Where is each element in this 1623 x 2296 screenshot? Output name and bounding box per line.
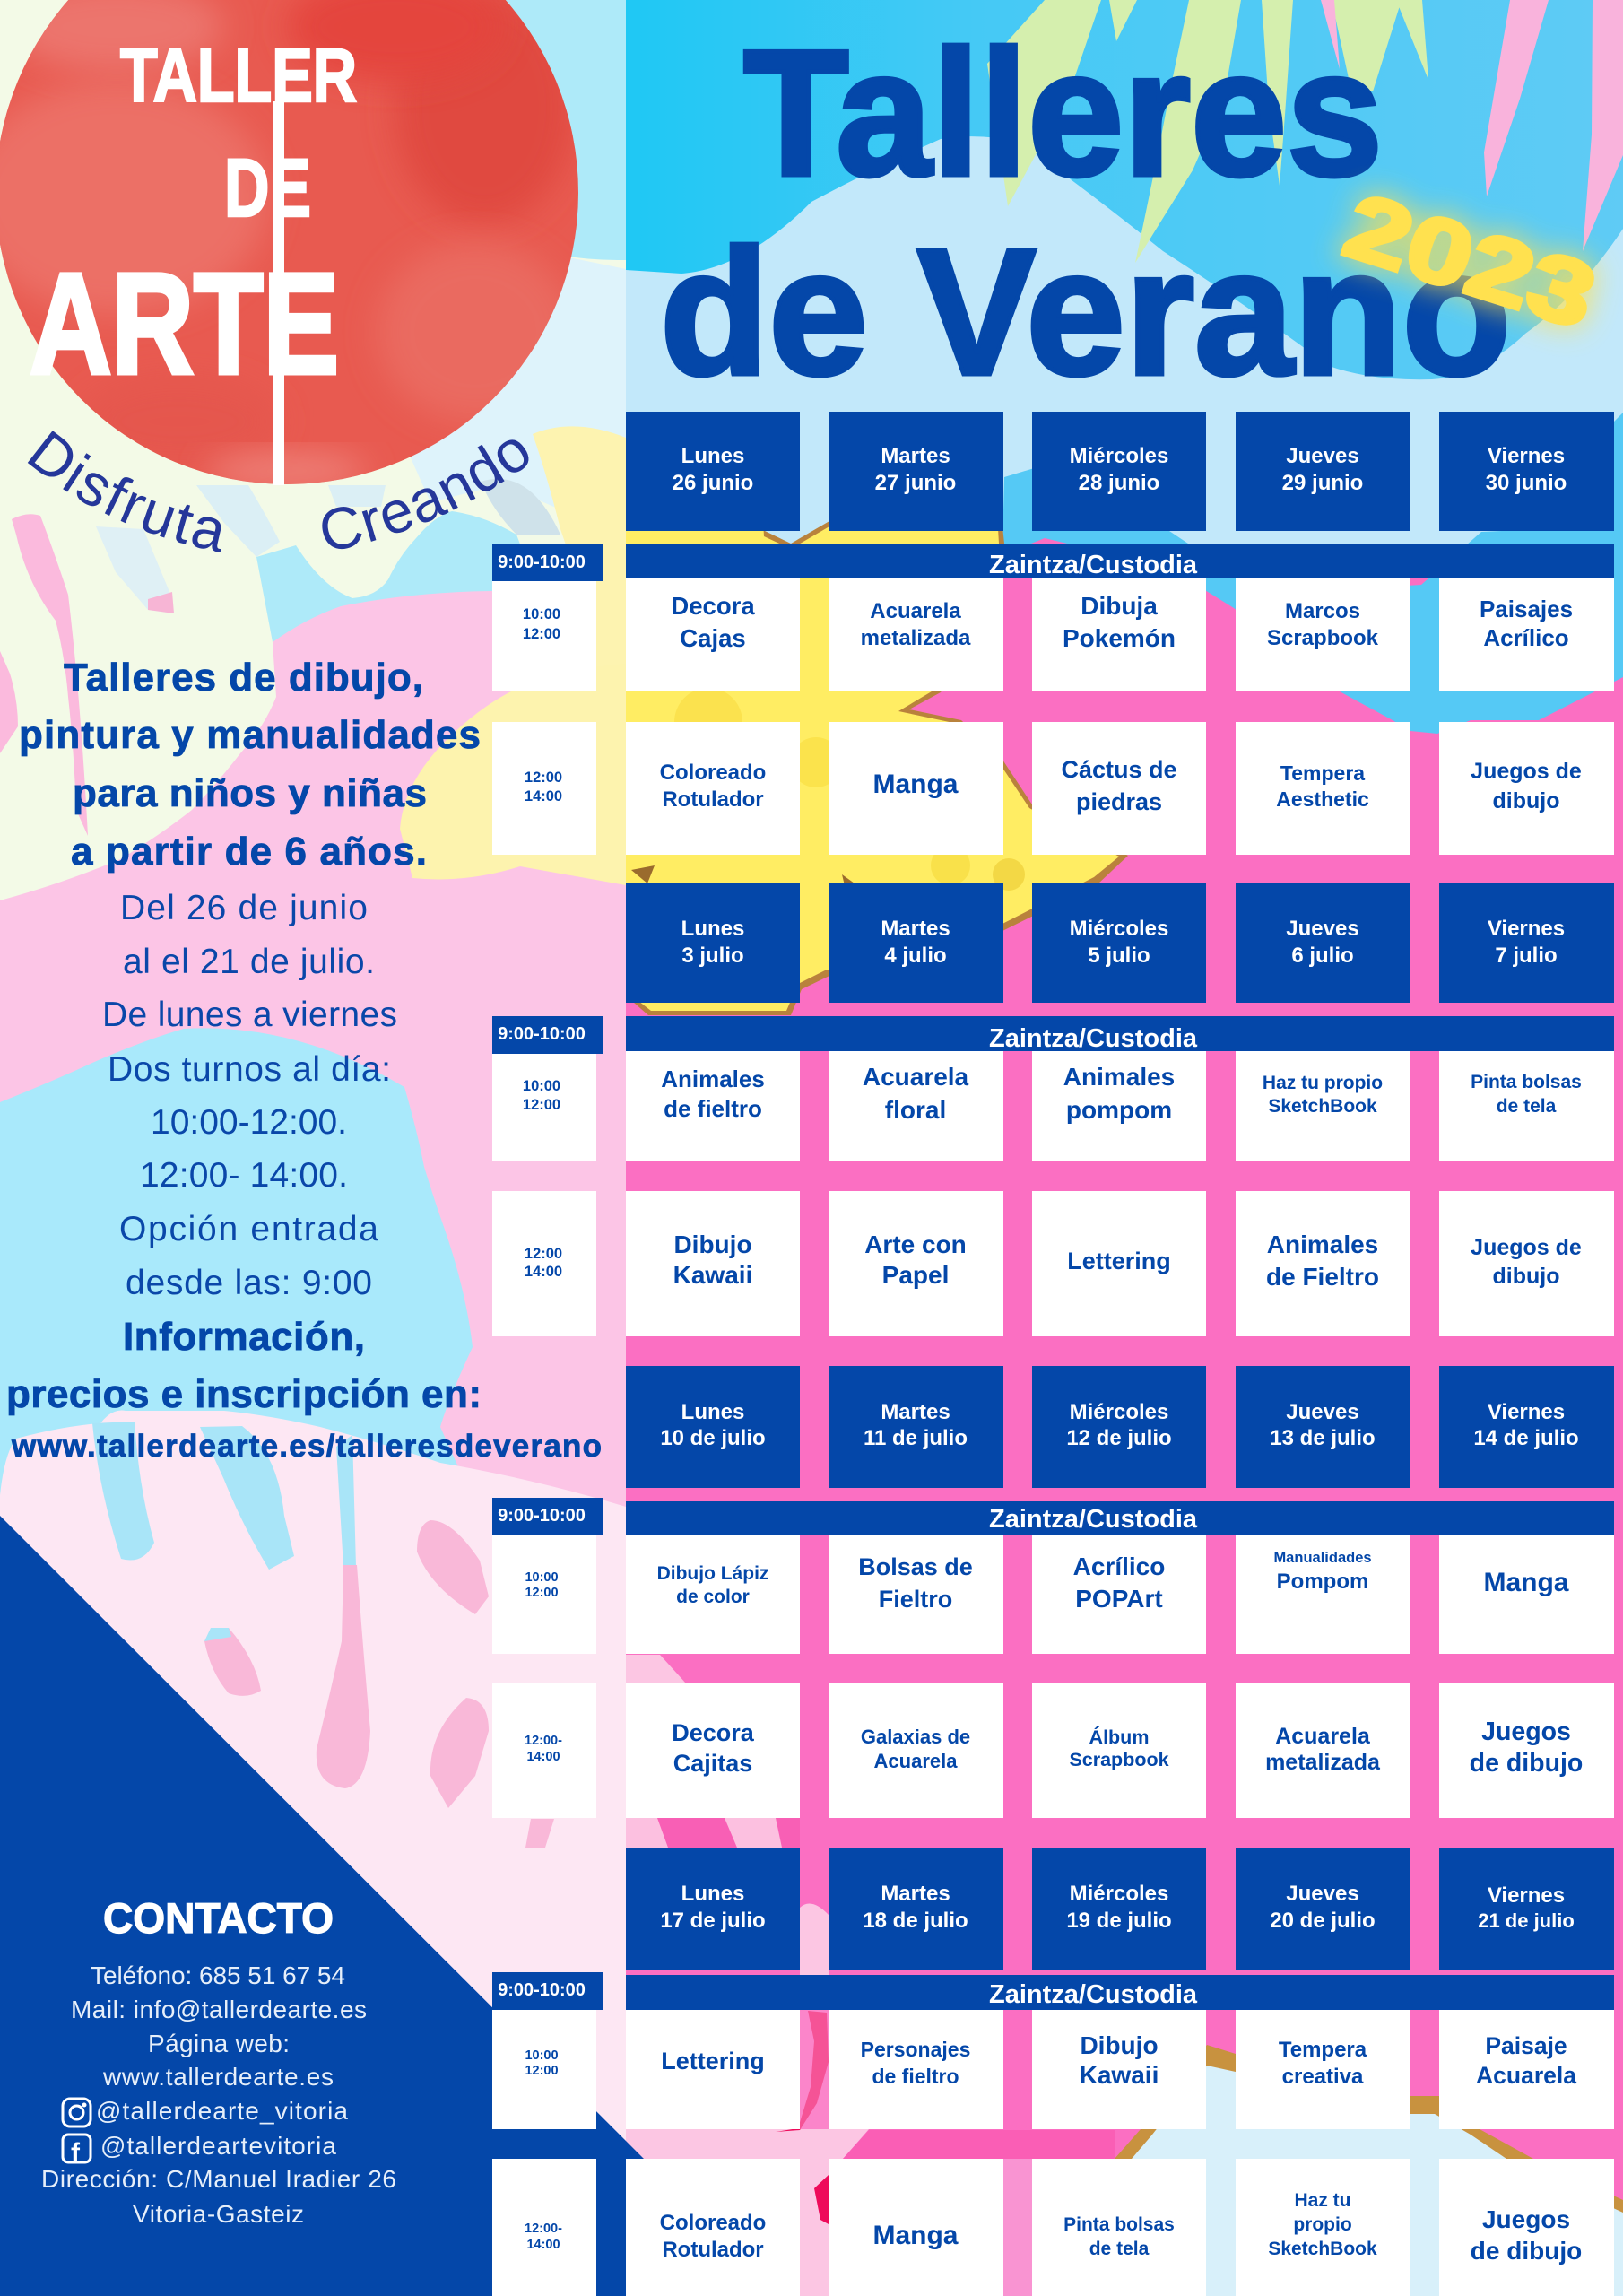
icon: red watercolor circle	[0, 0, 578, 489]
week 4 day headers: 18 de julio	[863, 1909, 968, 1933]
week 2 morning workshops: Acuarela	[863, 1063, 969, 1091]
icon: pink leaves	[1321, 0, 1623, 251]
week 3 morning workshops: Dibujo Lápiz	[657, 1563, 768, 1584]
time column	[492, 544, 603, 2296]
week 2 midday workshops: Dibujo	[673, 1231, 752, 1258]
contact details: @tallerdeartevitoria	[100, 2132, 336, 2160]
week 3 day headers: Miércoles	[1070, 1400, 1168, 1424]
week 3 morning workshops	[626, 1535, 1614, 1654]
week 1 day headers: 29 junio	[1282, 471, 1363, 495]
slot: midday week 2	[492, 1191, 596, 1336]
week 4 day headers: 20 de julio	[1270, 1909, 1376, 1933]
label: care hour week 3	[492, 1498, 603, 1535]
logo: taller de arte	[0, 0, 578, 552]
week 1 day headers: Jueves	[1286, 444, 1359, 468]
week 3 morning workshops: Fieltro	[879, 1586, 952, 1613]
intro text block: pintura y manualidades	[19, 713, 481, 757]
slot: midday week 4: 12:00-	[525, 2222, 562, 2236]
week 2 day headers: 4 julio	[884, 944, 947, 968]
contact details: Vitoria-Gasteiz	[133, 2200, 304, 2228]
week 4 midday workshops: Pinta bolsas	[1063, 2214, 1175, 2235]
week 4 day headers: 19 de julio	[1066, 1909, 1172, 1933]
heading: CONTACTO: CONTACTO	[103, 1894, 334, 1942]
main title: Talleres	[743, 13, 1383, 213]
slot: morning week 3: 10:00	[525, 1570, 559, 1585]
week 1 morning workshops: Acrílico	[1483, 624, 1569, 651]
slot: midday week 4: 14:00	[526, 2238, 560, 2252]
slot: morning week 4: 10:00	[525, 2048, 559, 2063]
slot: midday week 3: 14:00	[526, 1750, 560, 1764]
care bar week 1	[626, 544, 1614, 579]
week 2 midday workshops: Lettering	[1067, 1248, 1171, 1274]
week 1 midday workshops: Juegos de	[1471, 759, 1582, 784]
week 1 morning workshops: Decora	[671, 592, 755, 620]
week 4 morning workshops: Personajes	[861, 2038, 970, 2061]
week 4 midday workshops: SketchBook	[1268, 2239, 1377, 2259]
week 4 day headers: 17 de julio	[660, 1909, 766, 1933]
week 2 morning workshops: Animales	[1063, 1063, 1175, 1091]
icon: grey leaf	[481, 479, 560, 535]
week 3 morning workshops: Manualidades	[1273, 1550, 1372, 1566]
icon: right lower pink	[843, 2130, 1115, 2159]
week 4 day headers: Miércoles	[1070, 1882, 1168, 1906]
slot: midday week 1: 14:00	[525, 788, 562, 804]
year badge 2023: 2023	[1333, 174, 1607, 348]
week 4 midday workshops: Rotulador	[662, 2238, 764, 2262]
label: care hour week 1	[492, 544, 603, 581]
slot: midday week 1: 12:00	[525, 770, 562, 786]
icon: star cookie top faded	[533, 426, 626, 668]
week 2 day headers: 6 julio	[1291, 944, 1354, 968]
week 3 day headers: Jueves	[1286, 1400, 1359, 1424]
week 1 morning workshops: Scrapbook	[1267, 626, 1379, 650]
week 4 midday workshops: Juegos	[1482, 2205, 1570, 2233]
icon: facebook	[63, 2135, 91, 2168]
icon: star cookie arm faded	[400, 664, 626, 885]
slot: midday week 3	[492, 1683, 596, 1818]
label: care hour week 2: 9:00-10:00	[498, 1024, 586, 1044]
week 3 midday workshops: Decora	[672, 1719, 755, 1746]
week 2 morning workshops: Animales	[661, 1065, 765, 1092]
week 2 morning workshops	[626, 1051, 1614, 1161]
icon: column wash	[1003, 2159, 1032, 2296]
slot: morning week 1: 10:00	[523, 606, 560, 622]
icon: magenta stripes	[657, 1818, 800, 1848]
contact details: www.tallerdearte.es	[102, 2063, 334, 2091]
intro text block: Del 26 de junio	[120, 889, 368, 927]
intro text block: a partir de 6 años.	[71, 830, 427, 874]
week 2 morning workshops: Pinta bolsas	[1471, 1072, 1582, 1092]
week 2 morning workshops: pompom	[1066, 1096, 1172, 1124]
week 2 day headers: Viernes	[1488, 917, 1565, 941]
week 3 day headers: 12 de julio	[1066, 1426, 1172, 1450]
care bar week 3	[626, 1501, 1614, 1535]
week 2 day headers	[626, 883, 1614, 1003]
week 4 morning workshops: creativa	[1282, 2065, 1364, 2089]
week 4 day headers: 21 de julio	[1478, 1909, 1575, 1932]
icon: pink corner	[1031, 538, 1067, 544]
week 1 midday workshops: Rotulador	[662, 787, 764, 812]
icon: aqua shape	[256, 511, 538, 642]
week 2 midday workshops: de Fieltro	[1266, 1263, 1379, 1291]
week 1 midday workshops	[626, 722, 1614, 855]
icon: instagram	[63, 2099, 91, 2126]
week 4 morning workshops: Acuarela	[1476, 2062, 1576, 2089]
week 1 day headers: 28 junio	[1079, 471, 1159, 495]
week 1 morning workshops	[626, 578, 1614, 691]
main title: de Verano	[660, 213, 1511, 413]
week 3 day headers	[626, 1366, 1614, 1488]
intro text block: 10:00-12:00.	[151, 1103, 347, 1142]
slot: morning week 4: 12:00	[525, 2064, 559, 2078]
week 2 midday workshops: Kawaii	[673, 1261, 752, 1289]
week 4 midday workshops	[626, 2159, 1614, 2296]
week 2 day headers: 5 julio	[1088, 944, 1150, 968]
week 1 day headers	[626, 412, 1614, 531]
icon: red stripes	[776, 2011, 829, 2224]
week 3 midday workshops: Álbum	[1089, 1726, 1149, 1748]
care bar week 2	[626, 1016, 1614, 1053]
label: care hour week 3: 9:00-10:00	[498, 1506, 586, 1526]
week 3 midday workshops: Juegos	[1481, 1718, 1571, 1746]
week 3 day headers: 10 de julio	[660, 1426, 766, 1450]
background: left panel	[0, 0, 626, 2296]
week 3 morning workshops: Manga	[1483, 1568, 1569, 1597]
week 1 morning workshops: Acuarela	[870, 599, 961, 623]
week 3 midday workshops: Acuarela	[1275, 1724, 1371, 1749]
week 3 midday workshops: Galaxias de	[861, 1726, 970, 1748]
week 2 midday workshops	[626, 1191, 1614, 1336]
intro text block: Opción entrada	[119, 1210, 378, 1248]
care bar week 1: Zaintza/Custodia	[989, 551, 1198, 579]
intro text block: desde las: 9:00	[126, 1264, 372, 1302]
week 1 morning workshops: Dibuja	[1081, 592, 1158, 620]
week 1 midday workshops: Cáctus de	[1061, 756, 1177, 783]
slot: midday week 3: 12:00-	[525, 1734, 562, 1748]
intro text block: Dos turnos al día:	[108, 1050, 391, 1089]
week 3 day headers: Martes	[881, 1400, 950, 1424]
slot: morning week 2	[492, 1054, 596, 1161]
week 1 midday workshops: piedras	[1076, 788, 1162, 815]
icon: pen tip	[148, 592, 174, 613]
week 1 midday workshops: Coloreado	[660, 761, 766, 785]
week 4 midday workshops: de dibujo	[1471, 2237, 1582, 2265]
text: Disfruta: Disfruta	[27, 430, 221, 552]
week 3 day headers: 13 de julio	[1270, 1426, 1376, 1450]
care bar week 2: Zaintza/Custodia	[989, 1024, 1198, 1053]
icon: yellow star cookie	[626, 475, 1128, 1015]
icon: pale blob	[0, 1410, 626, 1525]
week 2 morning workshops: floral	[885, 1096, 946, 1124]
week 3 day headers: Lunes	[681, 1400, 744, 1424]
week 4 midday workshops: de tela	[1089, 2239, 1150, 2259]
week 1 morning workshops: Cajas	[680, 624, 746, 652]
contact details: Teléfono: 685 51 67 54	[91, 1961, 345, 1989]
week 4 midday workshops: propio	[1293, 2214, 1352, 2235]
week 4 day headers: Jueves	[1286, 1882, 1359, 1906]
label: care hour week 1: 9:00-10:00	[498, 552, 586, 572]
icon: pink drip top-left	[0, 514, 88, 836]
week 3 midday workshops: Scrapbook	[1069, 1749, 1169, 1770]
week 1 morning workshops: Marcos	[1285, 599, 1360, 623]
week 3 day headers: Viernes	[1488, 1400, 1565, 1424]
icon: light stripes	[626, 1818, 782, 1848]
intro text block: Información,	[123, 1315, 365, 1359]
week 2 midday workshops: Papel	[882, 1261, 949, 1289]
icon: aqua blob	[0, 1028, 473, 1525]
week 1 day headers: Martes	[881, 444, 950, 468]
icon: pink blob	[0, 591, 626, 1525]
week 2 morning workshops: Haz tu propio	[1263, 1073, 1383, 1093]
icon: facebook: f	[71, 2138, 81, 2168]
intro text block: 12:00- 14:00.	[140, 1156, 348, 1195]
text: ARTE: ARTE	[30, 243, 339, 404]
week 4 day headers: Lunes	[681, 1882, 744, 1906]
week 1 day headers: Lunes	[681, 444, 744, 468]
icon: pale pink paper	[626, 1655, 869, 2296]
week 2 day headers: 7 julio	[1495, 944, 1558, 968]
schedule grid	[626, 412, 1614, 2296]
slot: morning week 2: 12:00	[523, 1097, 560, 1113]
week 1 day headers: 30 junio	[1486, 471, 1567, 495]
week 4 day headers: Martes	[881, 1882, 950, 1906]
year badge 2023: 2023	[1333, 174, 1607, 348]
contact details: Mail: info@tallerdearte.es	[71, 1996, 367, 2023]
week 2 morning workshops: de fieltro	[664, 1095, 762, 1122]
intro text block: precios e inscripción en:	[6, 1372, 482, 1416]
slot: midday week 2: 14:00	[525, 1264, 562, 1280]
icon: blue cookie	[1115, 2045, 1623, 2296]
week 1 day headers: 27 junio	[875, 471, 956, 495]
week 3 midday workshops: metalizada	[1265, 1750, 1381, 1775]
text: DE: DE	[224, 143, 311, 234]
week 1 day headers: Viernes	[1488, 444, 1565, 468]
vertical divider	[273, 101, 284, 485]
week 4 day headers: Viernes	[1488, 1883, 1565, 1908]
blue triangle panel	[0, 1516, 644, 2296]
week 4 morning workshops: Dibujo	[1080, 2031, 1159, 2059]
week 2 day headers: Lunes	[681, 917, 744, 941]
week 2 morning workshops: SketchBook	[1268, 1096, 1377, 1117]
week 1 midday workshops: Aesthetic	[1276, 787, 1369, 811]
week 2 day headers: 3 julio	[681, 944, 744, 968]
slot: midday week 2: 12:00	[525, 1246, 562, 1262]
week 3 morning workshops: de color	[676, 1587, 750, 1607]
slot: morning week 2: 10:00	[523, 1078, 560, 1094]
label: care hour week 4: 9:00-10:00	[498, 1980, 586, 2000]
slot: morning week 4	[492, 2010, 596, 2129]
care bar week 4: Zaintza/Custodia	[989, 1980, 1198, 2009]
icon: green leaves	[987, 0, 1428, 263]
icon: pale pen drip	[96, 526, 174, 613]
intro text block	[6, 656, 602, 1464]
icon: aqua cap	[204, 1628, 231, 1641]
week 4 day headers	[626, 1848, 1614, 1970]
week 2 midday workshops: dibujo	[1493, 1264, 1559, 1289]
week 4 midday workshops: Manga	[872, 2221, 959, 2250]
week 3 day headers: 14 de julio	[1473, 1426, 1579, 1450]
label: care hour week 4	[492, 1972, 603, 2010]
week 4 morning workshops: de fieltro	[872, 2065, 959, 2088]
background: right panel	[626, 0, 1623, 2296]
week 2 day headers: Jueves	[1286, 917, 1359, 941]
week 3 midday workshops: Acuarela	[874, 1750, 958, 1772]
week 1 morning workshops: Paisajes	[1480, 596, 1573, 622]
week 3 morning workshops: Acrílico	[1073, 1552, 1165, 1580]
intro text block: al el 21 de julio.	[123, 943, 375, 981]
week 4 morning workshops	[626, 2010, 1614, 2129]
week 4 morning workshops: Paisaje	[1485, 2032, 1567, 2059]
week 1 morning workshops: metalizada	[861, 626, 971, 650]
week 1 midday workshops: dibujo	[1493, 788, 1559, 813]
slot: morning week 1	[492, 581, 596, 691]
slot: morning week 3	[492, 1535, 596, 1654]
week 3 morning workshops: Pompom	[1277, 1570, 1368, 1594]
intro text block: para niños y niñas	[73, 771, 427, 815]
icon: pale blue shapes	[196, 485, 386, 557]
icon: sky paper top	[626, 0, 1623, 379]
contact details	[41, 1961, 396, 2228]
text: TALLER: TALLER	[120, 33, 357, 117]
week 1 midday workshops: Manga	[872, 770, 959, 799]
week 4 midday workshops: Haz tu	[1295, 2190, 1350, 2211]
icon: side wash	[800, 2010, 829, 2129]
week 3 morning workshops: Bolsas de	[858, 1553, 973, 1580]
week 2 day headers: Martes	[881, 917, 950, 941]
slot: midday week 4	[492, 2159, 596, 2296]
week 3 morning workshops: POPArt	[1075, 1585, 1163, 1613]
week 2 midday workshops: Arte con	[864, 1231, 967, 1258]
week 4 midday workshops: Coloreado	[660, 2211, 766, 2235]
contact details: Página web:	[148, 2030, 290, 2057]
slot: morning week 1: 12:00	[523, 626, 560, 642]
main title	[660, 13, 1511, 413]
care bar week 3: Zaintza/Custodia	[989, 1505, 1198, 1534]
week 3 midday workshops	[626, 1683, 1614, 1818]
week 4 morning workshops: Lettering	[661, 2048, 765, 2074]
icon: aqua drips	[92, 1422, 356, 1570]
text: Creando: Creando	[322, 439, 529, 549]
slot: midday week 1	[492, 722, 596, 855]
week 4 morning workshops: Tempera	[1279, 2038, 1367, 2062]
week 4 morning workshops: Kawaii	[1080, 2061, 1159, 2089]
week 1 day headers: Miércoles	[1070, 444, 1168, 468]
contact block	[41, 1894, 396, 2228]
care bar week 4	[626, 1975, 1614, 2010]
label: care hour week 2	[492, 1016, 603, 1054]
week 3 day headers: 11 de julio	[864, 1426, 968, 1450]
week 2 day headers: Miércoles	[1070, 917, 1168, 941]
week 2 midday workshops: Animales	[1267, 1231, 1378, 1258]
week 1 midday workshops: Tempera	[1280, 761, 1365, 785]
intro text block: De lunes a viernes	[102, 996, 397, 1034]
icon: lower sky paper	[1002, 413, 1623, 734]
contact details: @tallerdearte_vitoria	[96, 2097, 348, 2125]
week 2 morning workshops: de tela	[1497, 1096, 1557, 1117]
week 3 midday workshops: Cajitas	[673, 1750, 752, 1777]
contact details: Dirección: C/Manuel Iradier 26	[41, 2165, 396, 2193]
week 1 morning workshops: Pokemón	[1063, 624, 1176, 652]
week 2 midday workshops: Juegos de	[1471, 1235, 1582, 1260]
week 3 midday workshops: de dibujo	[1470, 1749, 1583, 1778]
intro text block: www.tallerdearte.es/talleresdeverano	[11, 1429, 602, 1464]
icon: pink drips	[204, 1520, 554, 1848]
week 1 day headers: 26 junio	[673, 471, 753, 495]
slot: morning week 3: 12:00	[525, 1586, 559, 1600]
intro text block: Talleres de dibujo,	[64, 656, 423, 700]
